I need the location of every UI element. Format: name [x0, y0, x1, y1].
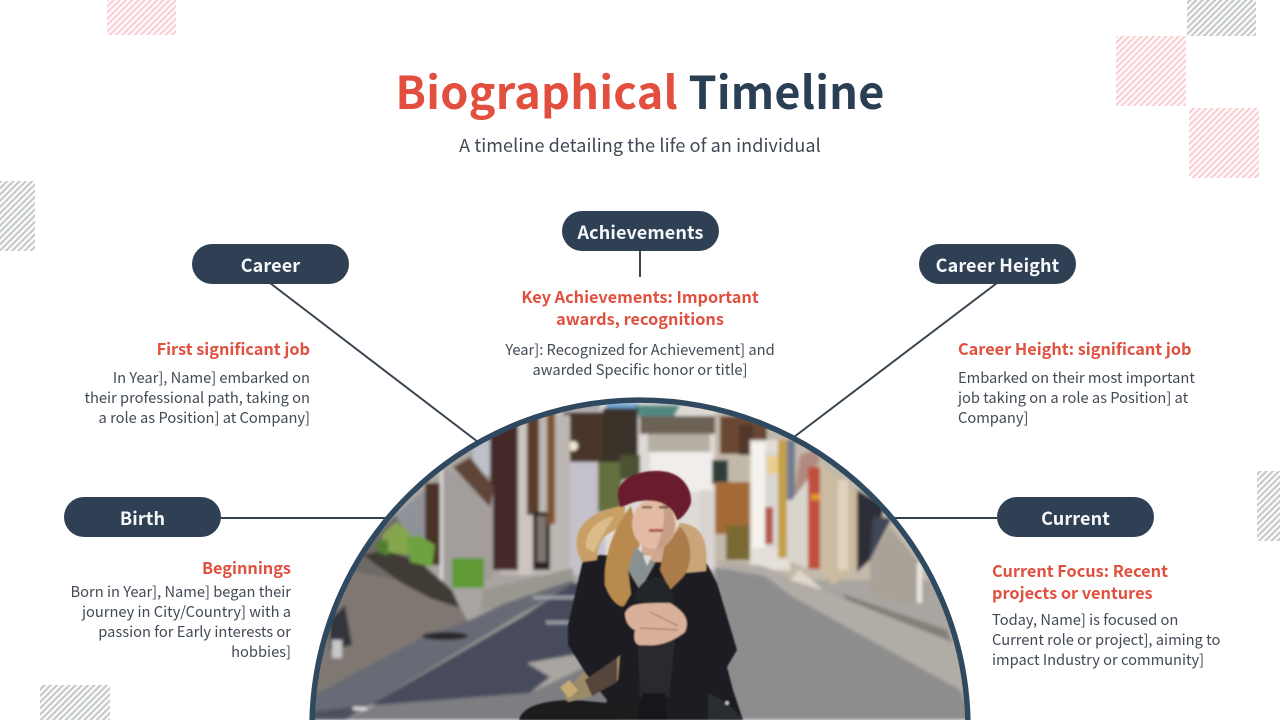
text block: career height — [957, 336, 1195, 428]
text block: beginnings: Born in Year], Name] began their — [71, 581, 291, 602]
text block: beginnings: hobbies] — [231, 641, 291, 662]
pill: Current: Current — [1041, 505, 1110, 531]
text block: achievements: Key Achievements: Important — [521, 284, 759, 308]
text block: current focus: Today, Name] is focused on — [992, 609, 1178, 630]
left pavement and road — [315, 579, 574, 714]
text block: achievements: awarded Specific honor or title] — [533, 359, 747, 380]
right pavement and road — [718, 561, 963, 690]
pill: Achievements — [562, 211, 719, 251]
right houses — [712, 412, 930, 581]
text block: career height: Company] — [958, 407, 1028, 428]
pill: Birth — [64, 497, 221, 537]
text block: current focus: impact Industry or community] — [992, 649, 1204, 670]
pill: Career Height: Career Height — [936, 252, 1059, 278]
retaining wall — [316, 572, 468, 696]
text block: achievements — [505, 284, 775, 380]
subtitle: A timeline detailing the life of an individual — [459, 132, 821, 158]
photo: woman seated on a street, in a circular frame — [309, 397, 971, 720]
green bins — [382, 522, 410, 555]
pill: Career Height — [919, 244, 1076, 284]
pill: Career — [192, 244, 349, 284]
text block: first significant job: In Year], Name] embarked on — [113, 367, 310, 388]
left houses — [555, 410, 605, 575]
woman — [519, 471, 743, 720]
text block: career height: Career Height: significant job — [958, 336, 1192, 360]
pill: Career: Career — [241, 252, 300, 278]
text block: current focus: projects or ventures — [992, 580, 1153, 604]
pill: Birth: Birth — [120, 505, 165, 531]
text block: beginnings: passion for Early interests or — [98, 621, 291, 642]
text block: first significant job: First significant job — [157, 336, 310, 360]
text block: first significant job — [84, 336, 310, 428]
text block: current focus: Current Focus: Recent — [992, 558, 1168, 582]
text block: achievements: Year]: Recognized for Achievement] and — [505, 339, 775, 360]
text block: career height: Embarked on their most important — [958, 367, 1195, 388]
text block: first significant job: their professional path, taking on — [84, 387, 310, 408]
title: Biographical Timeline — [395, 56, 885, 122]
text block: beginnings — [71, 555, 291, 662]
text block: achievements: awards, recognitions — [556, 306, 724, 330]
pill: Current — [997, 497, 1154, 537]
text block: current focus: Current role or project], aiming to — [992, 629, 1220, 650]
text block: beginnings: Beginnings — [202, 555, 291, 579]
text block: first significant job: a role as Position] at Company] — [99, 407, 310, 428]
pill: Achievements: Achievements — [578, 219, 703, 245]
text block: career height: job taking on a role as Position] at — [958, 387, 1188, 408]
text block: current focus — [992, 558, 1220, 670]
street background — [305, 395, 975, 720]
text block: beginnings: journey in City/Country] with a — [82, 601, 291, 622]
